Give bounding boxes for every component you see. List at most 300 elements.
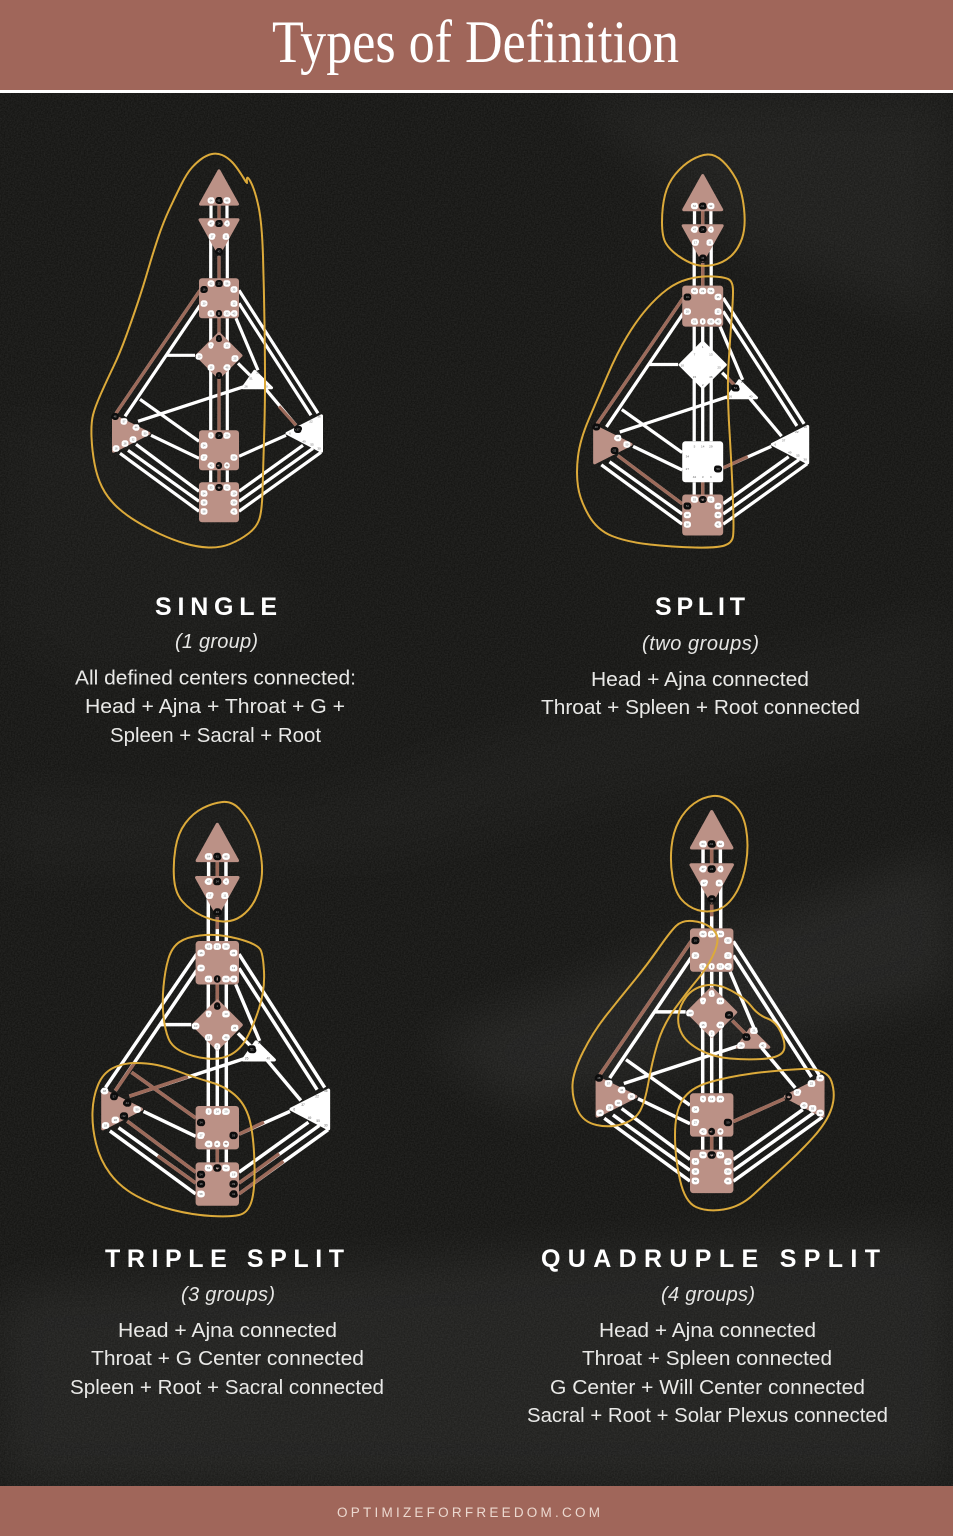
- description: triple split: Spleen + Root + Sacral connected: [70, 1376, 384, 1399]
- gates: 42: [207, 1142, 211, 1146]
- gates on white centers: 51: [250, 1048, 254, 1052]
- gates: 58: [686, 522, 689, 526]
- gates: 48: [103, 1089, 106, 1093]
- gates: 7: [208, 1012, 210, 1016]
- gates: 58: [203, 509, 206, 513]
- gates on white centers: 46: [709, 375, 713, 379]
- header band: [0, 0, 953, 90]
- outline: head and ajna group: [671, 796, 748, 912]
- gates: 28: [124, 441, 127, 445]
- outline: throat and spleen group: [572, 921, 718, 1126]
- description: single: [75, 666, 356, 747]
- gates: 28: [608, 1105, 612, 1109]
- gates: 15: [701, 1023, 705, 1027]
- gates on white centers: 6: [775, 442, 777, 446]
- gates on white centers: 22: [315, 1094, 319, 1098]
- gates on white centers: 37: [782, 438, 786, 442]
- diagram: single: [114, 171, 322, 522]
- gates: 4: [226, 221, 228, 225]
- gates on white centers: 15: [693, 375, 697, 379]
- gates: 16: [694, 938, 697, 942]
- gates: 55: [811, 1107, 815, 1111]
- description: triple split: Head + Ajna connected: [118, 1319, 337, 1342]
- gates: [103, 855, 237, 1196]
- outline: head and ajna group: [662, 154, 745, 266]
- footer url: OPTIMIZEFORFREEDOM.COM: [337, 1505, 600, 1520]
- gates: 32: [617, 1101, 620, 1105]
- gates: 41: [232, 1192, 236, 1196]
- gates: 31: [701, 964, 705, 968]
- gates: 33: [226, 311, 229, 315]
- heading: quadruple split: QUADRUPLE SPLIT: [541, 1245, 880, 1273]
- gates: 23: [218, 281, 221, 285]
- gates: 60: [710, 1153, 714, 1157]
- gates: 8: [217, 977, 219, 981]
- gates: 11: [225, 234, 228, 238]
- gates on white centers: 40: [266, 1056, 270, 1060]
- gates: 4: [710, 227, 712, 231]
- gates: 23: [710, 932, 714, 936]
- gates: 3: [711, 1129, 713, 1133]
- gates: 52: [719, 1153, 722, 1157]
- gates: 51: [745, 1035, 748, 1039]
- defined channels: [115, 862, 283, 1194]
- gates: 20: [686, 309, 689, 313]
- gates on white centers: 30: [317, 446, 321, 450]
- gates on white centers: 40: [264, 384, 268, 388]
- gates: 46: [226, 365, 229, 369]
- gates on white centers: 25: [717, 366, 721, 370]
- gates on white centers: 2: [702, 383, 704, 387]
- gates: 19: [233, 491, 236, 495]
- gates: 52: [224, 1166, 228, 1170]
- gates on white centers: 6: [293, 1107, 295, 1111]
- description: single: All defined centers connected:: [75, 666, 356, 690]
- gates on white centers: 3: [702, 475, 704, 479]
- gates on white centers: 26: [245, 1056, 249, 1060]
- gates on white centers: 26: [729, 394, 732, 398]
- gates: 38: [694, 1169, 697, 1173]
- gates on white centers: [681, 345, 807, 479]
- gates: 43: [710, 897, 714, 901]
- gates: 1: [217, 1004, 219, 1008]
- gates: 1: [218, 336, 220, 340]
- channels: [106, 862, 328, 1194]
- gates: 36: [819, 1076, 822, 1080]
- gates on white centers: 22: [309, 419, 313, 423]
- subheading: quadruple split: (4 groups): [661, 1284, 755, 1306]
- header rule: [0, 90, 953, 93]
- gates: 54: [686, 504, 689, 508]
- gates: 42: [701, 1129, 705, 1133]
- outline: single group: [91, 154, 265, 548]
- gates: 63: [224, 855, 228, 859]
- gates: 17: [208, 894, 212, 898]
- gates: 12: [233, 301, 236, 305]
- gates: 9: [226, 463, 228, 467]
- gates: 13: [224, 1012, 228, 1016]
- gates: [597, 842, 822, 1183]
- gates: 13: [226, 343, 229, 347]
- gates on white centers: 14: [701, 444, 705, 448]
- gates: 50: [630, 1095, 633, 1099]
- gates: 40: [761, 1044, 765, 1048]
- gates: 60: [701, 498, 705, 502]
- gates on white centers: 30: [803, 458, 807, 462]
- description: split: [541, 668, 860, 719]
- gates: 64: [693, 204, 697, 208]
- gates: 35: [726, 938, 730, 942]
- gates: [595, 204, 720, 526]
- gates: 19: [717, 504, 720, 508]
- gates: 18: [104, 1124, 108, 1128]
- gates: 45: [233, 311, 236, 315]
- gates: 15: [210, 365, 213, 369]
- gates on white centers: 5: [694, 444, 696, 448]
- gates: 27: [694, 1121, 697, 1125]
- gates: 17: [211, 234, 214, 238]
- gates: 1: [711, 992, 713, 996]
- gates: 64: [210, 198, 213, 202]
- gates on white centers: 22: [795, 430, 799, 434]
- gates: 25: [233, 1026, 237, 1030]
- gates on white centers: 27: [686, 467, 689, 471]
- gates: 35: [233, 287, 236, 291]
- gates: 6: [788, 1095, 790, 1099]
- gates on white centers: 1: [702, 345, 704, 349]
- gates: 62: [210, 281, 213, 285]
- gates: 25: [727, 1013, 731, 1017]
- gates: 41: [726, 1179, 730, 1183]
- gates on white centers: 37: [301, 1103, 305, 1107]
- gates: 29: [226, 433, 229, 437]
- gates: 59: [233, 455, 236, 459]
- gates: 62: [693, 289, 697, 293]
- gates: 23: [216, 945, 219, 949]
- gates: 12: [232, 966, 236, 970]
- outline: sacral, root and solar plexus group: [675, 1069, 834, 1210]
- gates: 61: [710, 842, 714, 846]
- gates: 8: [218, 311, 220, 315]
- gates: 46: [224, 1036, 228, 1040]
- gates: 16: [686, 295, 689, 299]
- gates: 58: [199, 1192, 203, 1196]
- gates: 42: [210, 463, 213, 467]
- title: Types of Definition: [272, 9, 679, 75]
- gates: 45: [717, 320, 720, 324]
- gates on white centers: 36: [324, 1089, 328, 1093]
- gates: 44: [616, 436, 620, 440]
- gates: 44: [135, 425, 138, 429]
- gates on white centers: 21: [741, 380, 745, 384]
- gates: 53: [207, 1166, 211, 1170]
- gates: 4: [720, 867, 722, 871]
- gates on white centers: 36: [803, 425, 807, 429]
- gates: 41: [233, 509, 236, 513]
- gates: 44: [126, 1101, 129, 1105]
- channels: [600, 849, 822, 1181]
- gates: 61: [218, 198, 221, 202]
- gates: 31: [207, 977, 211, 981]
- gates: 57: [113, 1094, 116, 1098]
- gates: 23: [701, 289, 705, 293]
- heading: single: SINGLE: [155, 593, 277, 621]
- gates: 31: [210, 311, 213, 315]
- gates: 33: [719, 964, 722, 968]
- gates on white centers: 21: [256, 370, 260, 374]
- gates: 56: [226, 281, 229, 285]
- gates: 20: [203, 301, 206, 305]
- subheading: triple split: (3 groups): [181, 1284, 275, 1306]
- gates: 17: [694, 241, 698, 245]
- gates: 53: [210, 485, 213, 489]
- gates: 34: [199, 1120, 203, 1124]
- heading: triple split: TRIPLE SPLIT: [105, 1245, 344, 1273]
- gates: 13: [719, 999, 722, 1003]
- description: split: Throat + Spleen + Root connected: [541, 696, 860, 719]
- gates: 56: [224, 945, 228, 949]
- gates: 62: [207, 945, 211, 949]
- gates: 63: [719, 842, 722, 846]
- diagram: quadruple split: [597, 812, 823, 1193]
- subheading: split: (two groups): [642, 633, 759, 655]
- gates: 27: [199, 1133, 203, 1137]
- description: quadruple split: G Center + Will Center connected: [550, 1376, 865, 1399]
- gates on white centers: 21: [258, 1041, 262, 1045]
- gates: 29: [719, 1097, 722, 1101]
- diagram: split: [595, 176, 808, 535]
- description: triple split: [70, 1319, 384, 1399]
- gates: 22: [810, 1082, 814, 1086]
- gates: 39: [232, 1182, 236, 1186]
- gates: 29: [224, 1109, 228, 1113]
- gates: 48: [114, 414, 117, 418]
- gates: 38: [203, 500, 206, 504]
- gates: 3: [217, 1142, 219, 1146]
- gates on white centers: 6: [289, 431, 291, 435]
- gates: 20: [694, 954, 697, 958]
- gates on white centers: 9: [710, 475, 712, 479]
- gates on white centers: 51: [734, 386, 737, 390]
- gates: 43: [218, 249, 221, 253]
- gates: 32: [122, 1114, 126, 1118]
- gates on white centers: 49: [302, 439, 306, 443]
- subheading: single: (1 group): [175, 631, 258, 653]
- gates: 46: [719, 1023, 722, 1027]
- gates on white centers: 55: [310, 442, 314, 446]
- gates: 50: [135, 1107, 139, 1111]
- gates: 44: [620, 1088, 624, 1092]
- gates: 14: [216, 1109, 219, 1113]
- centers: [597, 812, 823, 1193]
- gates: 59: [726, 1121, 730, 1125]
- gates on white centers: [244, 370, 321, 450]
- gates: 31: [693, 320, 697, 324]
- gates on white centers: 51: [249, 376, 253, 380]
- gates: 7: [702, 999, 704, 1003]
- gates: 50: [144, 431, 147, 435]
- gates: 52: [226, 485, 229, 489]
- gates: 16: [199, 951, 203, 955]
- gates: 26: [739, 1044, 743, 1048]
- gates: 57: [123, 419, 126, 423]
- gates: 53: [693, 498, 697, 502]
- gates: 33: [224, 977, 228, 981]
- gates on white centers: 29: [709, 444, 713, 448]
- gates: 2: [217, 1044, 219, 1048]
- gates: 35: [232, 951, 236, 955]
- gates: 24: [701, 227, 705, 231]
- defined channels: [600, 849, 784, 1150]
- gates on white centers: 34: [686, 455, 689, 459]
- gates: 49: [802, 1103, 806, 1107]
- gates: 64: [207, 855, 211, 859]
- gates: 60: [216, 1166, 219, 1170]
- gates: 62: [701, 932, 705, 936]
- gates on white centers: 40: [749, 394, 753, 398]
- gates: 43: [701, 256, 705, 260]
- gates: 61: [216, 855, 219, 859]
- gates: 39: [726, 1169, 730, 1173]
- gates: 14: [218, 433, 221, 437]
- gates on white centers: 55: [796, 454, 800, 458]
- centers: [114, 171, 322, 522]
- gates on white centers: 7: [694, 352, 696, 356]
- outline: throat and G group: [163, 935, 264, 1059]
- gates: 50: [625, 442, 629, 446]
- gates: 63: [709, 204, 713, 208]
- gates: 14: [710, 1097, 714, 1101]
- gates on white centers: 42: [693, 475, 697, 479]
- gates: 5: [210, 433, 212, 437]
- gates: 47: [693, 227, 697, 231]
- gates on white centers: 37: [296, 427, 300, 431]
- gates: 12: [717, 309, 720, 313]
- gates: 59: [232, 1133, 236, 1137]
- gates: 47: [207, 879, 211, 883]
- description: quadruple split: Head + Ajna connected: [599, 1319, 816, 1342]
- footer band: [0, 1486, 953, 1536]
- gates: 4: [225, 879, 227, 883]
- gates: 7: [210, 343, 212, 347]
- description: single: Spleen + Sacral + Root: [110, 724, 321, 747]
- gates: 35: [717, 295, 720, 299]
- description: single: Head + Ajna + Throat + G +: [85, 695, 345, 718]
- gates: 47: [701, 867, 705, 871]
- channels: [597, 211, 807, 524]
- gates: 18: [115, 446, 118, 450]
- gates: 11: [708, 241, 712, 245]
- gates on white centers: 36: [317, 414, 321, 418]
- gates: 9: [225, 1142, 227, 1146]
- gates: 24: [216, 879, 219, 883]
- gates: 9: [720, 1129, 722, 1133]
- defined channels: [116, 205, 296, 482]
- gates: 27: [203, 455, 206, 459]
- gates: 38: [686, 513, 689, 517]
- gates: 15: [207, 1036, 211, 1040]
- gates: 33: [709, 320, 713, 324]
- outline: head and ajna group: [174, 802, 262, 922]
- outline: spleen, root and sacral group: [92, 1063, 255, 1216]
- gates: 10: [688, 1011, 692, 1015]
- gates: 43: [216, 910, 219, 914]
- gates: 54: [694, 1160, 697, 1164]
- gates: 61: [701, 204, 705, 208]
- gates: 32: [613, 449, 617, 453]
- gates: 10: [198, 354, 201, 358]
- gates: 12: [726, 954, 730, 958]
- gates: 45: [726, 964, 730, 968]
- gates: 39: [717, 513, 720, 517]
- gates: 34: [694, 1108, 697, 1112]
- gates: 28: [114, 1118, 117, 1122]
- gates: 39: [233, 500, 236, 504]
- gates: 56: [719, 932, 722, 936]
- gates: 11: [223, 894, 227, 898]
- gates: 60: [218, 485, 221, 489]
- description: triple split: Throat + G Center connected: [91, 1347, 364, 1370]
- description: quadruple split: [527, 1319, 888, 1427]
- gates: 63: [226, 198, 229, 202]
- gates: 57: [607, 1082, 611, 1086]
- description: quadruple split: Throat + Spleen connected: [582, 1347, 832, 1370]
- gates: 18: [598, 1111, 602, 1115]
- gates: 21: [752, 1028, 756, 1032]
- outline: throat, spleen and root group: [577, 276, 734, 548]
- gates: 19: [232, 1172, 236, 1176]
- gates: 8: [711, 964, 713, 968]
- gates on white centers: [245, 1041, 328, 1128]
- gates: 2: [711, 1032, 713, 1036]
- gates: 20: [199, 966, 203, 970]
- gates on white centers: 55: [316, 1119, 320, 1123]
- gates: 48: [597, 1076, 601, 1080]
- gates: 58: [694, 1179, 697, 1183]
- heading: split: SPLIT: [655, 593, 745, 621]
- gates: 41: [717, 522, 720, 526]
- gates: 10: [194, 1024, 198, 1028]
- gates: 24: [710, 867, 714, 871]
- gates: 17: [703, 881, 706, 885]
- gates on white centers: 49: [308, 1116, 312, 1120]
- diagram: triple split: [103, 824, 329, 1206]
- gates on white centers: 30: [324, 1124, 328, 1128]
- description: split: Head + Ajna connected: [591, 668, 809, 691]
- gates on white centers: 26: [244, 384, 248, 388]
- gates: 3: [218, 463, 220, 467]
- gates: 8: [702, 320, 704, 324]
- gates: 53: [701, 1153, 705, 1157]
- gates: [114, 198, 237, 513]
- gates: 45: [232, 977, 236, 981]
- gates: 32: [132, 437, 135, 441]
- gates on white centers: 13: [709, 352, 713, 356]
- outline: G and will group: [678, 985, 784, 1059]
- gates: 19: [726, 1160, 730, 1164]
- gates: 52: [709, 498, 713, 502]
- gates: 2: [218, 373, 220, 377]
- gates: 54: [203, 491, 206, 495]
- gates: 25: [234, 356, 237, 360]
- gates: 34: [203, 443, 206, 447]
- gates: 5: [208, 1109, 210, 1113]
- gates: 56: [709, 289, 713, 293]
- gates: 24: [218, 221, 221, 225]
- description: quadruple split: Sacral + Root + Solar Plexus connected: [527, 1404, 888, 1427]
- gates: 38: [199, 1182, 203, 1186]
- centers: [103, 824, 329, 1206]
